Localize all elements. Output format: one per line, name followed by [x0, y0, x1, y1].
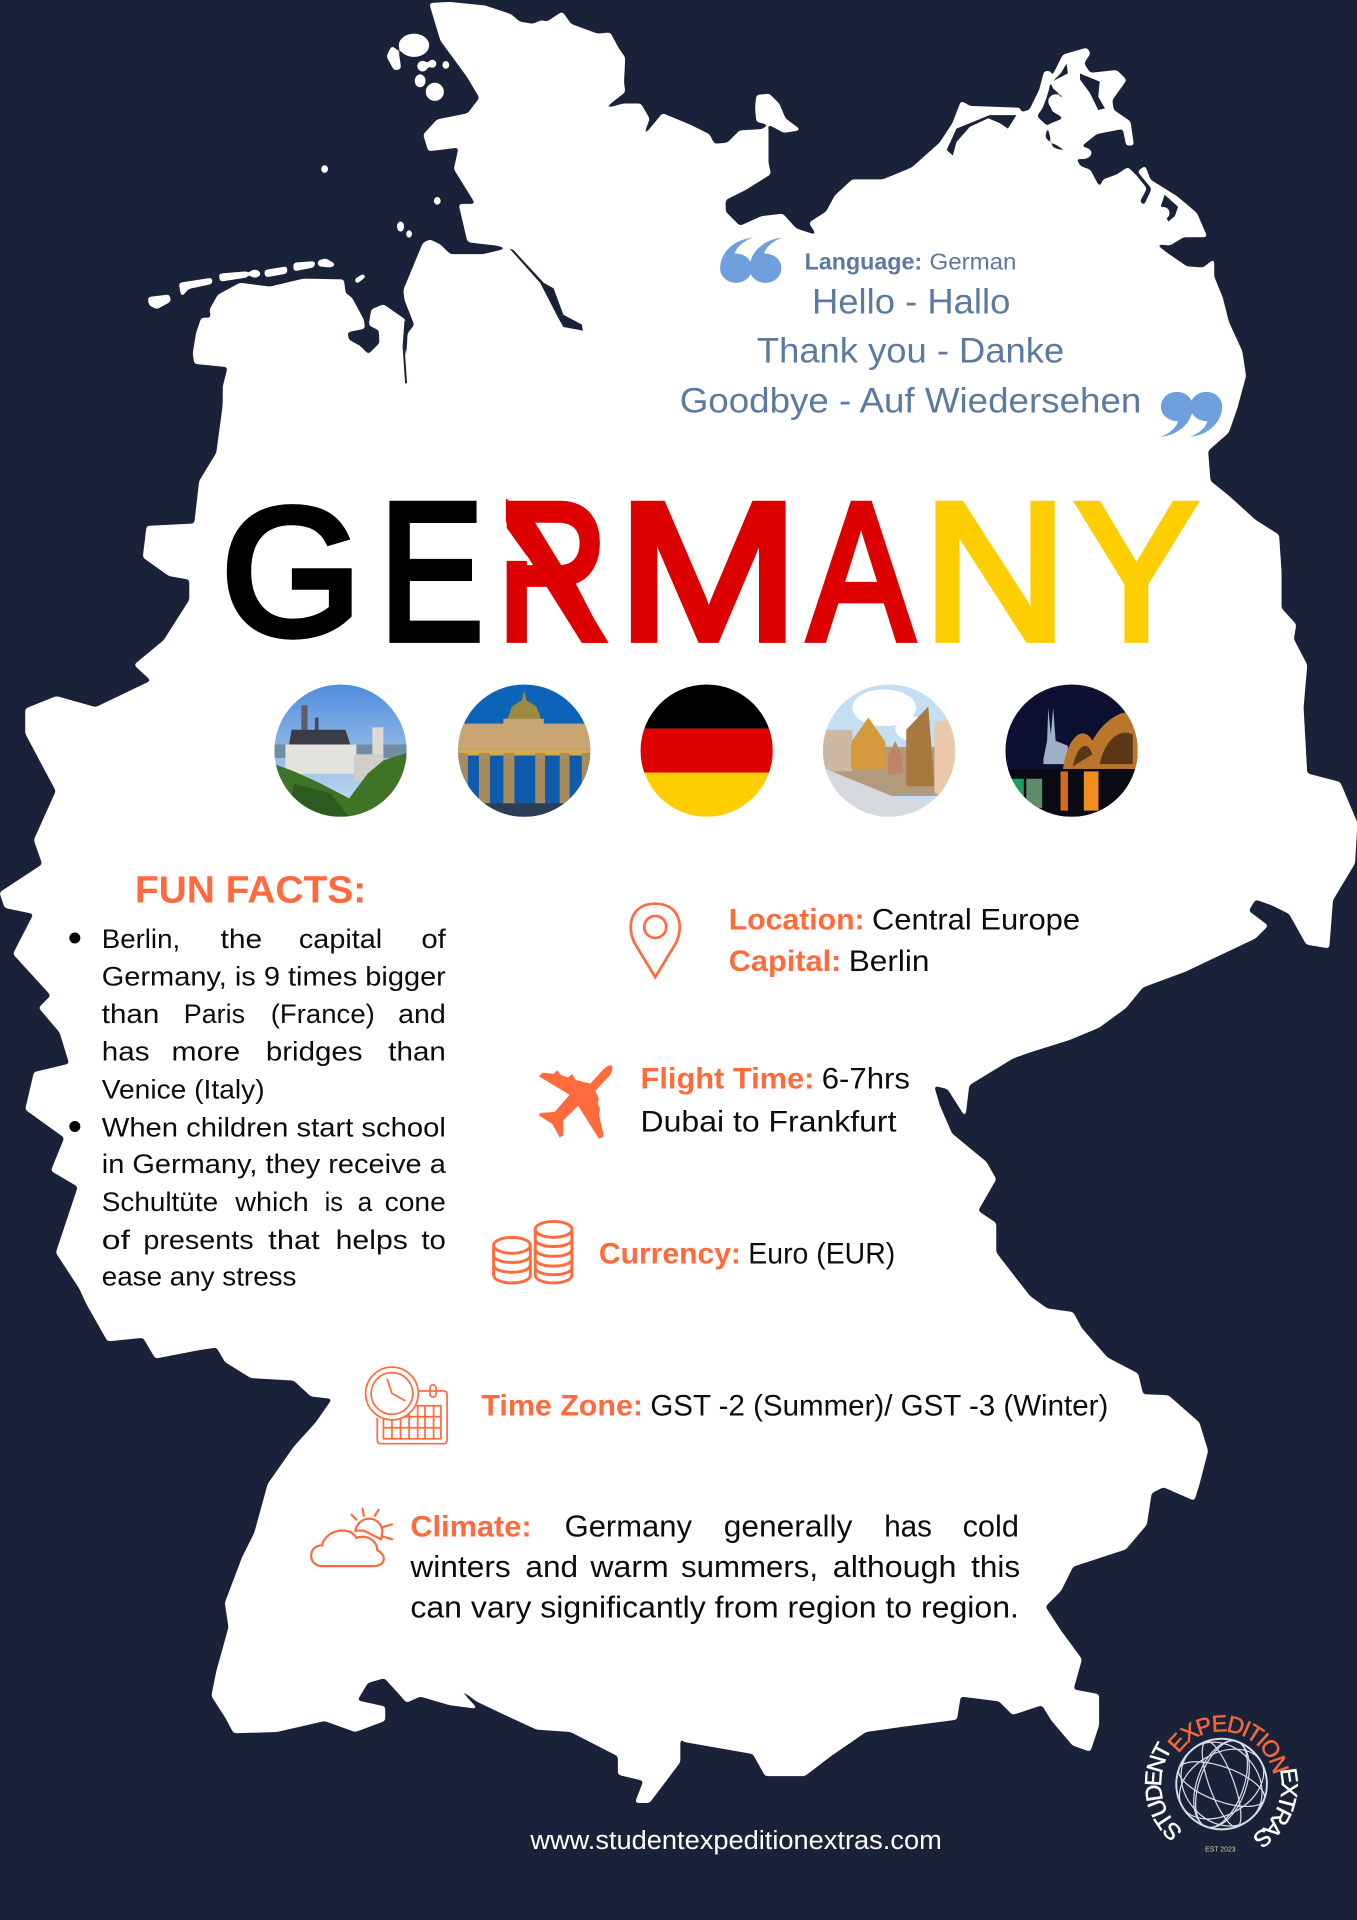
fact two text — [102, 1112, 446, 1292]
climate text: can vary significantly from region to region. — [410, 1591, 1019, 1625]
title: GERMANY: E — [380, 462, 483, 681]
fact two text: in Germany, they receive a — [102, 1149, 446, 1179]
location text: Central Europe — [872, 903, 1080, 936]
title: GERMANY: Y — [1075, 462, 1198, 681]
fact two text: presents — [143, 1225, 254, 1255]
location text: Berlin — [849, 945, 930, 978]
currency text — [599, 1238, 895, 1271]
fun facts heading: FUN FACTS: — [135, 869, 366, 911]
climate text: generally — [724, 1510, 853, 1544]
climate text: this — [971, 1550, 1020, 1584]
fact one text: Berlin, — [102, 924, 180, 954]
icon: sun and cloud — [311, 1509, 392, 1566]
fact one text: than — [102, 999, 159, 1029]
climate text: although — [833, 1550, 956, 1584]
logo text: extras: EXTRAS — [1254, 1768, 1298, 1847]
flight time text: Flight Time: — [641, 1063, 814, 1096]
closing quote mark — [1160, 392, 1222, 437]
icon: location pin — [631, 904, 680, 977]
language label: Language: — [805, 248, 922, 274]
language value: German — [930, 248, 1016, 274]
flight time text: 6-7hrs — [822, 1063, 910, 1096]
icon: airplane — [539, 1065, 612, 1139]
bullet two — [69, 1121, 80, 1132]
climate text: has — [884, 1510, 932, 1544]
fact two text: to — [421, 1225, 446, 1255]
climate text: Climate: — [410, 1511, 532, 1544]
Usedom islet — [1157, 207, 1170, 219]
time zone text: Time Zone: — [481, 1390, 643, 1423]
fact one text: Paris — [184, 999, 245, 1029]
title: GERMANY: A — [808, 462, 914, 681]
fact one text: more — [172, 1036, 240, 1066]
fact two text: cone — [385, 1187, 446, 1217]
climate text: Germany — [565, 1510, 693, 1544]
photo: Rothenburg old town — [823, 684, 958, 820]
logo text: expedition: EXPEDITION — [1167, 1715, 1289, 1774]
fact one text: Venice (Italy) — [102, 1074, 265, 1104]
fact one text: the — [221, 924, 262, 954]
bullet one — [69, 932, 80, 943]
title: GERMANY — [221, 462, 1198, 681]
location text — [729, 903, 1080, 978]
photo: Brandenburg Gate — [458, 684, 590, 817]
fact two text: which — [234, 1187, 309, 1217]
location text: Capital: — [729, 945, 841, 978]
fun facts list — [69, 924, 446, 1292]
photo: Cologne at night — [1005, 684, 1138, 817]
title: GERMANY: N — [923, 462, 1067, 681]
coastal inlets — [947, 64, 1178, 222]
location text: Location: — [729, 903, 865, 936]
logo globe — [1164, 1726, 1279, 1842]
Weser inlet — [404, 321, 406, 383]
flag of Germany — [641, 684, 773, 817]
opening quote mark — [720, 238, 783, 283]
logo text: student: STUDENT — [1144, 1740, 1181, 1840]
fact two text: of — [102, 1225, 131, 1255]
climate text: and — [525, 1550, 578, 1584]
phrase: thank you: Thank you - Danke — [757, 330, 1064, 370]
fact two text: a — [358, 1187, 372, 1217]
currency text: Currency: — [599, 1238, 741, 1271]
climate text: winters — [409, 1550, 511, 1584]
climate text: summers, — [681, 1550, 818, 1584]
language panel — [680, 238, 1222, 437]
title: GERMANY: R — [497, 462, 608, 681]
fact one text — [102, 924, 446, 1104]
Elbe estuary — [510, 249, 583, 331]
fact one text: of — [421, 924, 446, 954]
fact two text: helps — [336, 1225, 408, 1255]
flight time text — [641, 1063, 910, 1138]
phrase: goodbye: Goodbye - Auf Wiedersehen — [680, 381, 1141, 421]
title: GERMANY: M — [617, 462, 799, 681]
fact one text: and — [398, 999, 446, 1029]
time zone text: GST -2 (Summer)/ GST -3 (Winter) — [650, 1390, 1108, 1423]
fact two text: ease any stress — [102, 1262, 296, 1292]
icon: clock and calendar — [366, 1367, 447, 1444]
fact one text: capital — [299, 924, 382, 954]
fact one text: bridges — [266, 1036, 363, 1066]
fact two text: Schultüte — [102, 1187, 218, 1217]
fact one text: has — [102, 1036, 150, 1066]
fact two text: that — [268, 1225, 320, 1255]
icon: coin stacks — [494, 1221, 572, 1283]
climate text: cold — [963, 1510, 1019, 1544]
flight time text: Dubai to Frankfurt — [641, 1105, 897, 1138]
photo: Neuschwanstein castle — [274, 684, 407, 817]
title: GERMANY: G — [221, 471, 361, 673]
climate text: warm — [589, 1550, 669, 1584]
currency text: Euro (EUR) — [748, 1238, 895, 1271]
logo text: established year: EST 2023 — [1205, 1844, 1236, 1853]
fact two text: When children start school — [102, 1112, 446, 1142]
fact two text: is — [325, 1187, 343, 1217]
phrase: hello: Hello - Hallo — [812, 281, 1010, 321]
fact one text: Germany, is 9 times bigger — [102, 962, 446, 992]
fact one text: (France) — [271, 999, 375, 1029]
fact one text: than — [388, 1036, 446, 1066]
website url: www.studentexpeditionextras.com — [529, 1827, 942, 1855]
climate text — [409, 1510, 1020, 1625]
logo: Student Expedition Extras — [1144, 1715, 1298, 1853]
